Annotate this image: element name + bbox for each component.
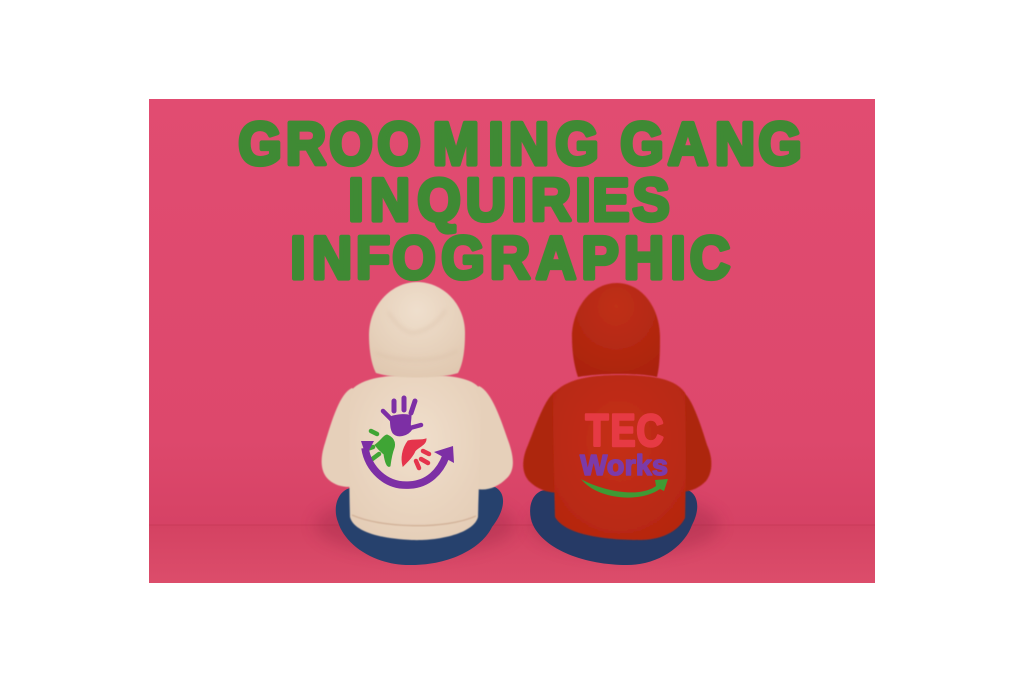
- jeans: beige figure: [336, 487, 503, 565]
- shadow: red figure: [530, 495, 720, 555]
- torso: red hoodie: [553, 375, 686, 540]
- title: INFOGRAPHIC: [290, 225, 730, 292]
- logo text: Works: Works: [580, 450, 668, 482]
- hem: beige hoodie: [352, 515, 476, 526]
- sleeve: red left: [523, 392, 570, 493]
- title: INQUIRIES: [348, 167, 670, 234]
- title: [238, 110, 802, 292]
- sleeve: beige left: [322, 388, 366, 487]
- hood: beige hoodie: [369, 282, 465, 378]
- green handprint: [367, 431, 395, 466]
- sleeve: beige right: [466, 386, 513, 490]
- panel: pink backdrop: [149, 99, 875, 583]
- torso: beige hoodie: [349, 375, 481, 540]
- logo text: TEC: TEC: [585, 405, 664, 456]
- red handprint: [402, 439, 429, 468]
- logo: handprints and arrow: [361, 398, 454, 485]
- figure: red hoodie: [523, 283, 720, 565]
- jeans: red figure: [530, 490, 697, 565]
- hood folds: beige: [375, 310, 458, 360]
- purple handprint: [383, 398, 421, 436]
- purple curved arrow: [361, 441, 454, 485]
- figure: beige hoodie: [315, 282, 515, 565]
- green arrow: [581, 479, 668, 498]
- sleeve: red right: [670, 392, 711, 492]
- hood: red hoodie: [572, 283, 660, 377]
- title: GROOMINGGANG: [238, 110, 802, 178]
- shadow: beige figure: [315, 495, 515, 555]
